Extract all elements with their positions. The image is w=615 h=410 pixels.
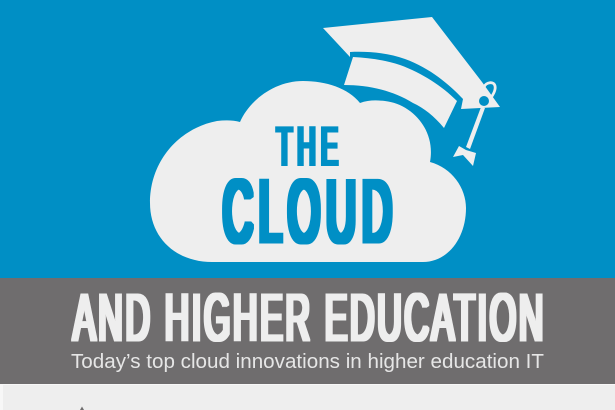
cap band [344, 57, 457, 128]
tassel end [453, 146, 476, 166]
cap mortarboard [323, 17, 500, 109]
tassel loop [484, 83, 495, 99]
infographic header: CLOUD [223, 162, 398, 260]
icon: clipped marker at bottom edge [80, 406, 84, 410]
infographic header: THE [277, 115, 343, 177]
tassel cord [466, 107, 485, 149]
icon: cloud [150, 81, 466, 262]
panel: grey title band [0, 278, 615, 384]
panel: blue hero background [0, 0, 615, 278]
icon: tassel knot [479, 96, 489, 106]
panel: light content area [3, 385, 615, 410]
icon: graduation cap [323, 17, 500, 166]
subtitle: Today’s top cloud innovations in higher education IT [71, 351, 544, 373]
